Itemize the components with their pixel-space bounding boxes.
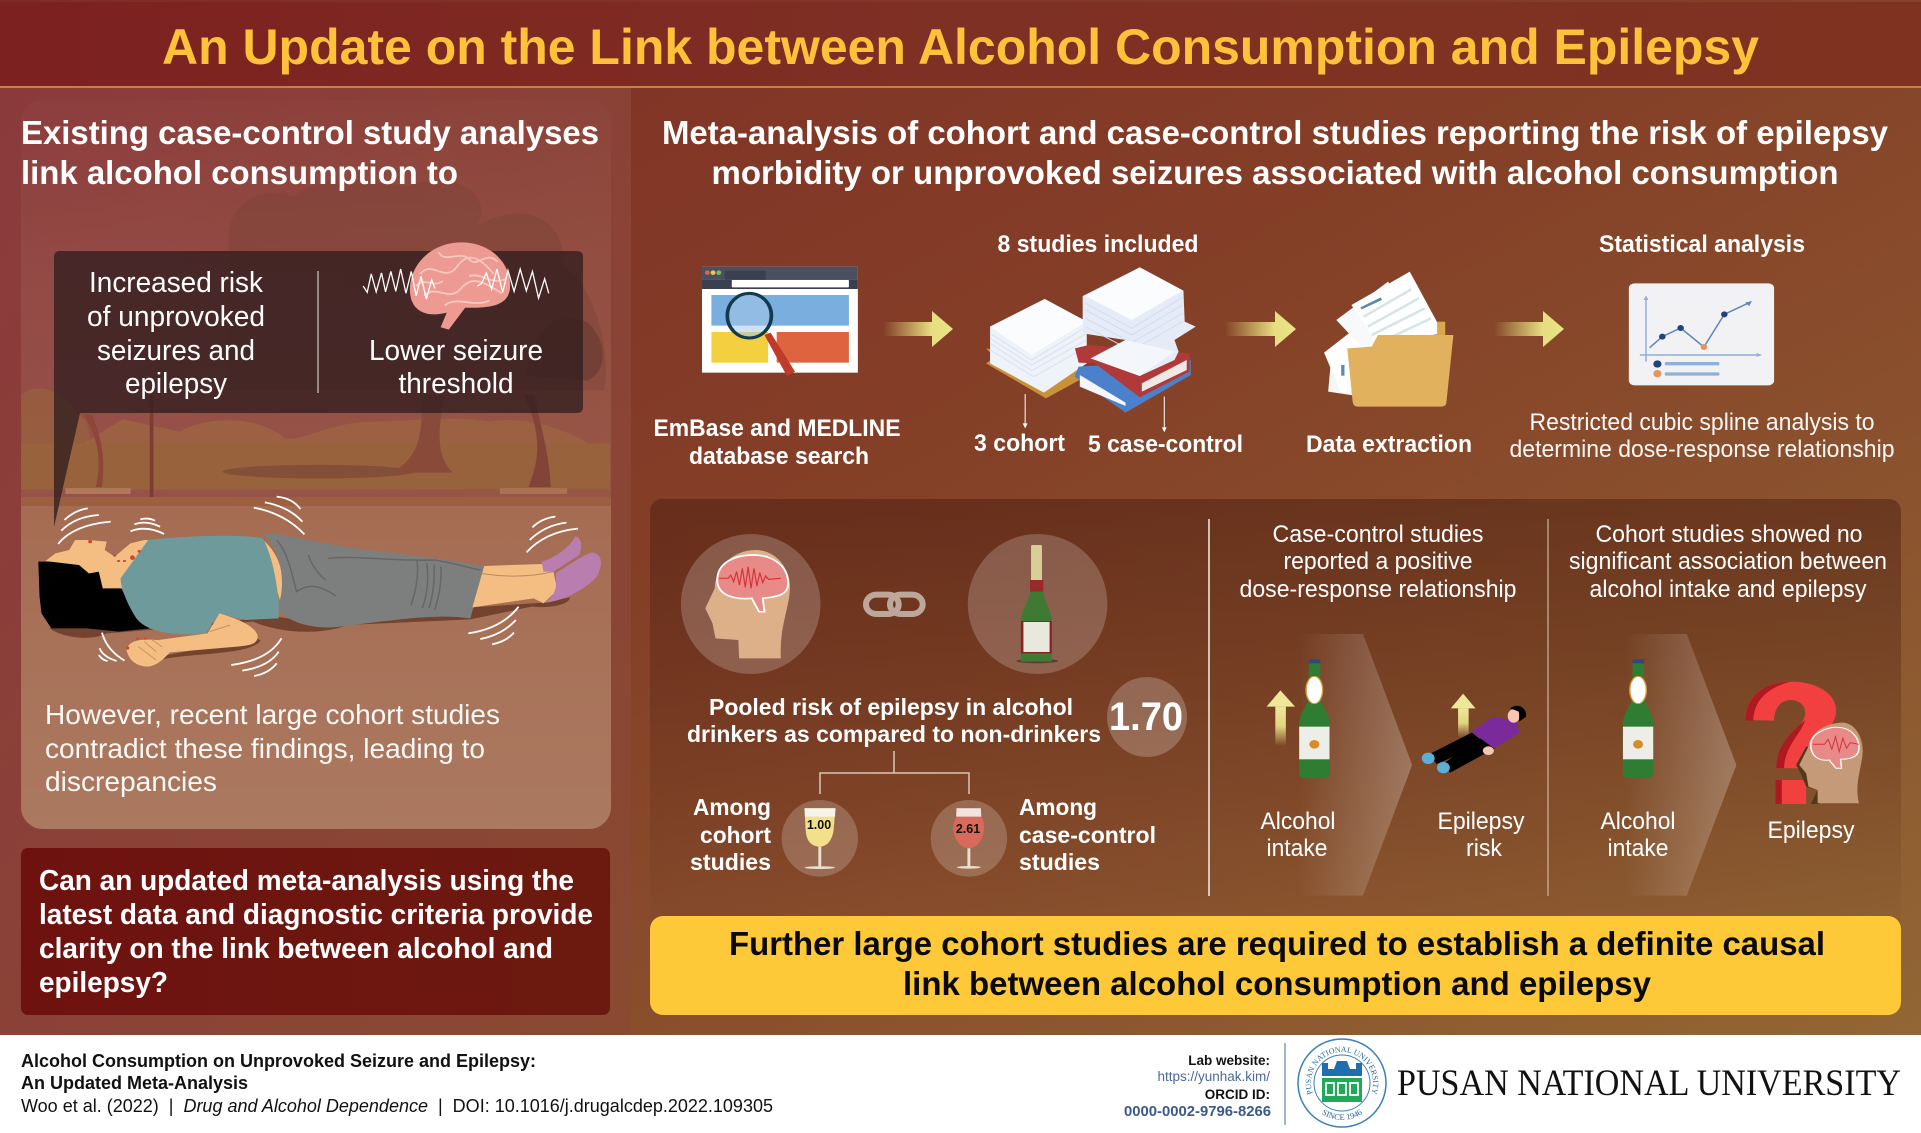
icon: browser window with magnifier bbox=[702, 267, 858, 376]
callout: dark speech box with two effects bbox=[54, 242, 583, 527]
icon: glass 1.00: 1.00 bbox=[807, 818, 831, 832]
lab and ORCID info bbox=[1124, 1053, 1271, 1120]
text: cohort contradiction note bbox=[45, 699, 500, 797]
text: lower seizure threshold bbox=[369, 335, 543, 400]
text: increased risk: Increased risk bbox=[89, 267, 263, 299]
text: cohort contradiction note: discrepancies bbox=[45, 766, 217, 797]
label: 5 case-control: 5 case-control bbox=[1088, 431, 1243, 458]
lab and ORCID info: https://yunhak.kim/ bbox=[1157, 1069, 1270, 1084]
callout: research question: clarity on the link between alcohol and bbox=[39, 933, 553, 965]
left column heading: Existing case-control study analyses bbox=[21, 114, 599, 151]
shadow bbox=[49, 597, 570, 638]
label: among case-control studies: Among bbox=[1019, 794, 1097, 820]
connector: split to sub-groups bbox=[820, 751, 969, 794]
text: spline analysis: determine dose-response relationship bbox=[1510, 436, 1894, 463]
scene background trees and park bbox=[21, 180, 610, 512]
logo: Pusan National University seal: PUSAN NATIONAL UNIVERSITY bbox=[1306, 1046, 1378, 1095]
header band with title: An Update on the Link between Alcohol Consumption and Epilepsy bbox=[162, 19, 1759, 75]
callout: conclusion: link between alcohol consumption and epilepsy bbox=[903, 965, 1652, 1002]
text: case-control finding: dose-response relationship bbox=[1240, 576, 1516, 603]
icon: falling person bbox=[1422, 706, 1526, 773]
icon: up arrow bbox=[1451, 694, 1476, 738]
small arrows bbox=[1025, 394, 1164, 430]
text: cohort finding: alcohol intake and epilepsy bbox=[1590, 576, 1866, 603]
lab and ORCID info: Lab website: bbox=[1188, 1053, 1270, 1068]
callout: research question: epilepsy? bbox=[39, 967, 168, 999]
arrow: search to studies bbox=[883, 311, 953, 347]
label: among cohort studies: studies bbox=[690, 849, 771, 875]
label: epilepsy risk: Epilepsy bbox=[1438, 808, 1524, 835]
right column heading: morbidity or unprovoked seizures associated with alcohol consumption bbox=[712, 154, 1838, 191]
text: case-control finding bbox=[1240, 521, 1516, 603]
text: pooled risk bbox=[687, 694, 1101, 747]
lab and ORCID info: 0000-0002-9796-8266 bbox=[1124, 1103, 1271, 1120]
socks bbox=[542, 537, 601, 603]
text: increased risk: seizures and bbox=[97, 335, 255, 367]
label: database search: EmBase and MEDLINE bbox=[654, 415, 900, 442]
face and neck bbox=[45, 540, 150, 588]
citation bbox=[21, 1051, 773, 1116]
callout: research question: latest data and diagnostic criteria provide bbox=[39, 899, 593, 931]
hair bbox=[38, 562, 149, 632]
label: among case-control studies: studies bbox=[1019, 849, 1100, 875]
label: epilepsy risk: risk bbox=[1466, 835, 1503, 862]
icon: folder with documents bbox=[1324, 272, 1453, 407]
text: pooled risk: Pooled risk of epilepsy in alcohol bbox=[709, 694, 1073, 720]
citation: An Updated Meta-Analysis bbox=[21, 1073, 248, 1093]
label: database search: database search bbox=[689, 443, 869, 470]
chevron: cohort relation bbox=[1623, 634, 1863, 896]
divider bbox=[1208, 519, 1210, 896]
label: 3 cohort: 3 cohort bbox=[974, 430, 1065, 457]
stat: pooled risk 1.70 bbox=[1107, 677, 1187, 757]
text: lower seizure threshold: threshold bbox=[398, 368, 514, 400]
right column heading bbox=[662, 114, 1889, 191]
icon: line chart card bbox=[1629, 283, 1774, 385]
label: alcohol intake bbox=[1260, 808, 1336, 862]
icon: glass 2.61 bbox=[931, 800, 1007, 877]
icon: wine bottle in circle bbox=[968, 534, 1107, 674]
icon: up arrow bbox=[1267, 690, 1295, 746]
illustration: person having a seizure bbox=[38, 497, 601, 676]
label: among cohort studies: cohort bbox=[700, 822, 771, 848]
label: epilepsy: Epilepsy bbox=[1768, 817, 1854, 844]
lab and ORCID info: ORCID ID: bbox=[1205, 1087, 1270, 1102]
icon: paper stacks and books bbox=[986, 267, 1196, 432]
label: alcohol intake: intake bbox=[1266, 835, 1328, 862]
citation: Woo et al. (2022) | Drug and Alcohol Dependence | DOI: 10.1016/j.drugalcdep.2022.109305 bbox=[21, 1096, 773, 1116]
icon: head with brain in circle bbox=[681, 534, 821, 674]
label: alcohol intake: intake bbox=[1608, 835, 1668, 862]
icon: brain with EEG waves bbox=[363, 242, 549, 330]
text: cohort finding bbox=[1569, 521, 1887, 603]
panel: park scene with seizure illustration bbox=[21, 191, 611, 829]
label: data extraction: Data extraction bbox=[1306, 431, 1472, 458]
label: epilepsy risk bbox=[1438, 808, 1524, 862]
text: case-control finding: reported a positive bbox=[1284, 548, 1472, 575]
shake marks bbox=[58, 497, 578, 676]
callout: research question: Can an updated meta-analysis using the bbox=[39, 865, 574, 897]
arrow: studies to extraction bbox=[1225, 311, 1296, 347]
label: among cohort studies: Among bbox=[693, 794, 771, 820]
left column heading: link alcohol consumption to bbox=[21, 154, 458, 191]
icon: glass 1.00 bbox=[782, 800, 858, 877]
text: lower seizure threshold: Lower seizure bbox=[369, 335, 543, 367]
legs bbox=[472, 564, 557, 607]
text: cohort finding: significant association between bbox=[1569, 548, 1887, 575]
label: among cohort studies bbox=[690, 794, 771, 875]
text: increased risk: of unprovoked bbox=[87, 301, 265, 333]
callout: research question bbox=[21, 848, 610, 1015]
label: database search bbox=[654, 415, 900, 470]
icon: link chain bbox=[866, 595, 923, 614]
label: alcohol intake: Alcohol bbox=[1600, 808, 1676, 835]
logo: Pusan National University seal bbox=[1297, 1038, 1387, 1128]
right column heading: Meta-analysis of cohort and case-control studies reporting the risk of epilepsy bbox=[662, 114, 1889, 151]
text: cohort contradiction note: contradict these findings, leading to bbox=[45, 733, 485, 764]
text: spline analysis bbox=[1510, 409, 1894, 463]
shirt bbox=[121, 536, 279, 634]
label: alcohol intake bbox=[1600, 808, 1676, 862]
label: among case-control studies bbox=[1019, 794, 1156, 875]
chevron: case-control relation bbox=[1267, 634, 1526, 896]
stat: pooled risk 1.70: 1.70 bbox=[1109, 695, 1183, 739]
text: cohort contradiction note: However, recent large cohort studies bbox=[45, 699, 500, 730]
label: alcohol intake: Alcohol bbox=[1260, 808, 1336, 835]
header band with title bbox=[0, 2, 1921, 88]
text: spline analysis: Restricted cubic spline analysis to bbox=[1530, 409, 1874, 436]
arrow: extraction to analysis bbox=[1494, 311, 1564, 347]
footer band bbox=[0, 1035, 1921, 1133]
label: 8 studies included: 8 studies included bbox=[998, 231, 1198, 258]
panel: left column background bbox=[0, 87, 631, 1035]
belly bbox=[261, 538, 282, 600]
label: statistical analysis: Statistical analysis bbox=[1599, 231, 1805, 258]
left column heading bbox=[21, 114, 599, 191]
divider bbox=[1547, 519, 1549, 896]
text: increased risk: epilepsy bbox=[125, 368, 227, 400]
text: increased risk bbox=[87, 267, 265, 400]
logo: Pusan National University seal: SINCE 1946 bbox=[1322, 1109, 1362, 1120]
label: among case-control studies: case-control bbox=[1019, 822, 1156, 848]
text: pooled risk: drinkers as compared to non-drinkers bbox=[687, 721, 1101, 747]
icon: bottle bbox=[1299, 659, 1329, 778]
trousers bbox=[263, 533, 484, 627]
callout: conclusion: Further large cohort studies are required to establish a definite causal bbox=[729, 925, 1825, 962]
text: case-control finding: Case-control studies bbox=[1272, 521, 1484, 548]
text: cohort finding: Cohort studies showed no bbox=[1596, 521, 1862, 548]
panel: results bbox=[650, 499, 1901, 959]
callout: conclusion bbox=[650, 916, 1901, 1015]
icon: question mark with head bbox=[1746, 682, 1863, 804]
nail marks bbox=[88, 540, 147, 650]
icon: glass 2.61: 2.61 bbox=[956, 822, 980, 836]
icon: bottle bbox=[1623, 659, 1653, 778]
arm and hand bbox=[126, 613, 258, 667]
citation: Alcohol Consumption on Unprovoked Seizure and Epilepsy: bbox=[21, 1051, 536, 1071]
